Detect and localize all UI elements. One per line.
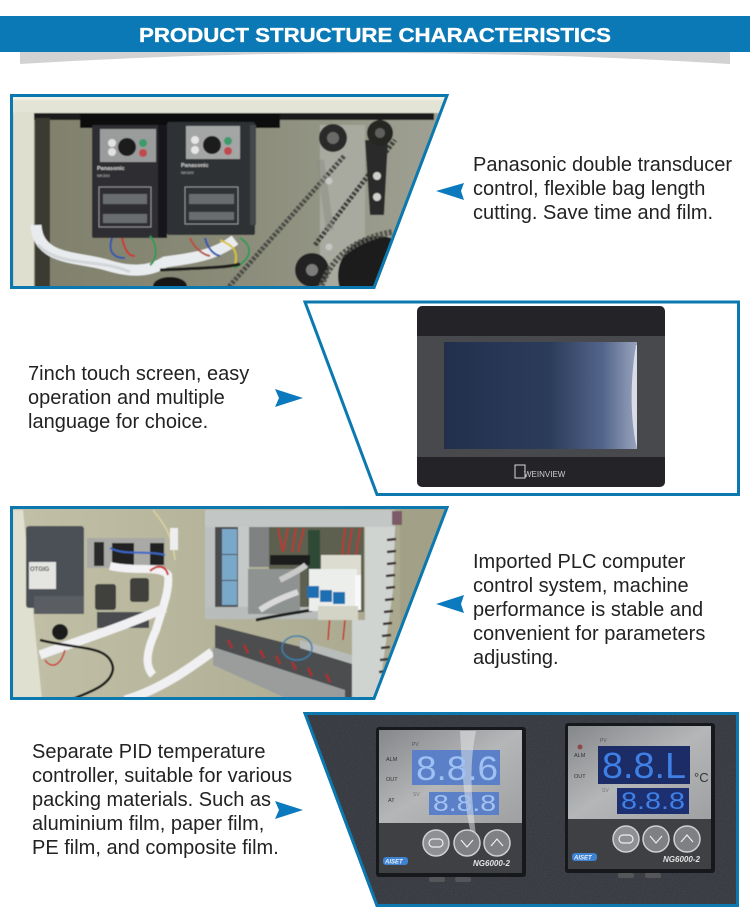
text: PID caption: PE film, and composite film. [32, 837, 279, 859]
controller left: ALM [386, 757, 398, 763]
controller left: AISET [384, 860, 404, 866]
arrow: to PLC cabinet [436, 595, 464, 613]
controller left: AT [388, 798, 395, 804]
text: PLC caption: performance is stable and [473, 599, 703, 621]
controller right: NG6000-2 [663, 855, 700, 864]
text: PID caption: aluminium film, paper film, [32, 813, 264, 835]
panel border [12, 508, 447, 698]
PLC modules [248, 569, 300, 614]
inverter left [92, 125, 167, 238]
text: PLC caption: control system, machine [473, 575, 689, 597]
text: PID caption: packing materials. Such as [32, 789, 271, 811]
photo: PLC control cabinet [10, 506, 450, 701]
arrow: to touch screen [275, 389, 303, 407]
panel: touch screen [305, 302, 738, 494]
photo: Weinview touch screen [417, 306, 665, 487]
panel border [305, 714, 738, 906]
cable bundles [40, 510, 212, 700]
inverter right: MK300 [181, 170, 194, 175]
text: transducer caption: control, flexible bag length [473, 178, 705, 200]
panel: PLC cabinet [10, 506, 450, 701]
inverter left: Panasonic [97, 166, 125, 172]
panel: PID controllers [300, 710, 740, 910]
photo: Weinview touch screen: WEINVIEW [524, 470, 566, 479]
controller left: SV [413, 792, 420, 798]
text: transducer caption: cutting. Save time and film. [473, 202, 713, 224]
text: PLC caption: adjusting. [473, 647, 559, 669]
controller right: AISET [573, 856, 593, 862]
controller left [376, 727, 526, 882]
controller right: ALM [574, 753, 586, 759]
controller left: NG6000-2 [473, 859, 510, 868]
photo: textured machine panel [300, 710, 740, 910]
relays [87, 538, 165, 568]
chain drive [152, 119, 398, 289]
wiring [36, 225, 249, 272]
text: transducer caption: Panasonic double transducer [473, 154, 732, 176]
text: touch screen caption: 7inch touch screen, easy [28, 363, 249, 385]
title: PRODUCT STRUCTURE CHARACTERISTICS [139, 24, 611, 47]
text: touch screen caption: language for choice. [28, 411, 208, 433]
red wires [278, 528, 360, 640]
inverter right [167, 122, 256, 235]
HMI back [26, 526, 84, 608]
text: PID caption: Separate PID temperature [32, 741, 265, 763]
steel frame [205, 510, 395, 527]
header banner [0, 16, 750, 64]
photo: PLC control cabinet: OTGIG [30, 567, 50, 573]
right duct [352, 527, 395, 700]
terminal blocks [215, 625, 352, 700]
inverter right: Panasonic [181, 163, 209, 169]
panel border [12, 96, 447, 288]
panel: inverter photo [10, 94, 450, 289]
text: touch screen caption: operation and multiple [28, 387, 225, 409]
text: PLC caption: Imported PLC computer [473, 551, 686, 573]
controller left: OUT [386, 777, 398, 783]
controller right: PV [600, 738, 607, 744]
switches [95, 584, 116, 610]
controller right: 8.8.L [602, 745, 686, 786]
controller right: SV [602, 788, 609, 794]
photo: dual Panasonic transducers [13, 97, 445, 289]
banner bar [0, 16, 750, 52]
banner shadow [20, 52, 730, 64]
inverter left: MK300 [97, 173, 110, 178]
controller left: 8.8.6 [416, 750, 498, 788]
arrow: to PID controllers [275, 801, 303, 819]
text: PID caption: controller, suitable for various [32, 765, 292, 787]
controller left: PV [412, 742, 419, 748]
controller right: °C [694, 770, 709, 785]
controller right: 8.8.8 [621, 788, 685, 815]
arrow: to transducers [436, 183, 464, 200]
panel frame [305, 302, 738, 494]
controller right [565, 723, 715, 878]
circuit breakers [320, 554, 362, 576]
text: PLC caption: convenient for parameters [473, 623, 705, 645]
controller right: OUT [574, 774, 586, 780]
controller left: 8.8.8 [433, 790, 496, 816]
